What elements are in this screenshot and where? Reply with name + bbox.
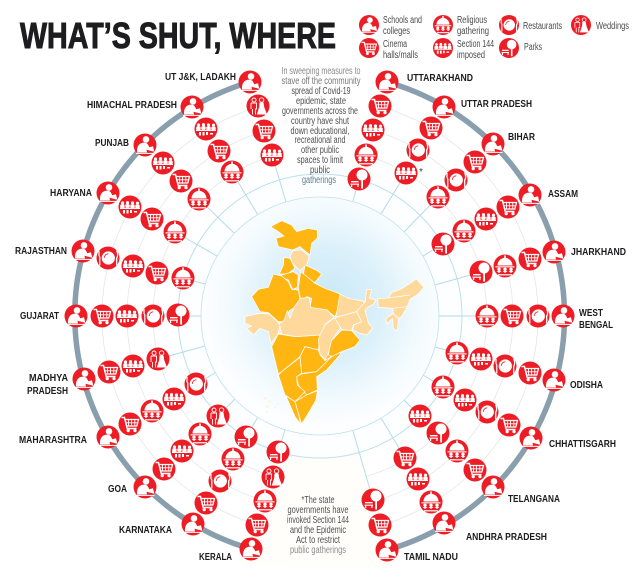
shut states: [252, 221, 360, 424]
state: Punjab: PUNJAB: [95, 137, 129, 149]
state: Goa: [108, 404, 230, 498]
state: UT J&K, Ladakh: UT J&K, LADAKH: [165, 71, 236, 83]
state: Chhattisgarh: [432, 376, 616, 450]
state: Maharashtra: [19, 372, 208, 448]
footnote: governments have: [288, 505, 349, 516]
state: Madhya Pradesh: MADHYA: [29, 372, 68, 384]
legend item: restaurants: Restaurants: [523, 21, 562, 32]
state: UT J&K, Ladakh: [165, 70, 284, 166]
state: Haryana: HARYANA: [50, 187, 92, 199]
footnote: Act to restrict: [296, 535, 340, 546]
map of India: [245, 221, 424, 424]
state: Uttar Pradesh: UTTAR PRADESH: [461, 98, 532, 110]
intro text: governments across the: [282, 106, 358, 117]
state: Madhya Pradesh: [27, 348, 170, 397]
legend item: parks: Parks: [524, 42, 542, 53]
legend item: cinema halls/malls: halls/malls: [383, 50, 418, 61]
state: Uttar Pradesh: [394, 96, 532, 184]
legend item: section 144 imposed: imposed: [457, 50, 485, 61]
intro text: gatherings: [302, 175, 336, 186]
state: Karnataka: KARNATAKA: [119, 524, 172, 536]
state: Uttar Pradesh: *: [419, 167, 423, 178]
grey outer ring: [75, 82, 564, 550]
footnote: *The state: [302, 495, 335, 506]
legend item: weddings: Weddings: [596, 21, 629, 32]
footnote: public gatherings: [290, 545, 346, 556]
state: West Bengal: WEST: [579, 307, 603, 319]
state: Goa: GOA: [108, 483, 127, 495]
state: Haryana: [50, 182, 186, 244]
state: Andhra Pradesh: ANDHRA PRADESH: [466, 531, 547, 543]
state: Kerala: [199, 440, 290, 563]
intro text: In sweeping measures to: [282, 66, 361, 77]
state: Madhya Pradesh: PRADESH: [27, 385, 68, 397]
intro text: spread of Covid-19: [292, 86, 351, 97]
intro text: epidemic, state: [296, 96, 346, 107]
state: Rajasthan: RAJASTHAN: [15, 245, 67, 257]
legend item: cinema halls/malls: [359, 38, 418, 61]
footnote: invoked Section 144: [287, 515, 349, 526]
partly shut states: [245, 250, 424, 360]
title: WHAT’S SHUT, WHERE: [20, 15, 336, 56]
state: Jharkhand: [470, 240, 626, 284]
state: Uttarakhand: [348, 70, 473, 190]
state: Karnataka: [119, 426, 258, 536]
state: Gujarat: [20, 304, 190, 328]
state: Himachal Pradesh: [87, 96, 244, 184]
state: Telangana: [408, 404, 560, 505]
intro text: recreational and: [294, 135, 346, 146]
intro text: country have shut: [291, 116, 349, 127]
legend item: cinema halls/malls: Cinema: [383, 39, 407, 50]
state: Tamil Nadu: [362, 488, 458, 563]
legend item: religious gathering: [433, 15, 489, 37]
legend item: schools and colleges: Schools and: [383, 15, 422, 26]
intro text: public: [310, 165, 330, 176]
intro text: [282, 66, 361, 186]
state: Jharkhand: JHARKHAND: [571, 246, 626, 258]
state: Assam: ASSAM: [548, 188, 578, 200]
state: Uttarakhand: UTTARAKHAND: [407, 72, 473, 84]
legend item: parks: [499, 38, 542, 58]
legend item: religious gathering: Religious: [457, 15, 487, 26]
legend item: section 144 imposed: [433, 38, 494, 61]
state: Kerala: KERALA: [199, 551, 232, 563]
state: Punjab: [95, 134, 210, 210]
legend item: weddings: [571, 15, 629, 35]
state: Chhattisgarh: CHHATTISGARH: [549, 438, 616, 450]
footnote: [287, 495, 349, 556]
legend: [359, 15, 629, 61]
state: Himachal Pradesh: HIMACHAL PRADESH: [87, 99, 177, 111]
intro text: spaces to limit: [297, 155, 343, 166]
legend item: schools and colleges: colleges: [383, 26, 410, 37]
state: Assam: [432, 184, 578, 256]
central disc: [201, 197, 439, 435]
state: Odisha: ODISHA: [570, 379, 603, 391]
state: West Bengal: BENGAL: [579, 319, 613, 331]
intro text: other public: [301, 145, 339, 156]
state: Tamil Nadu: TAMIL NADU: [404, 551, 458, 563]
legend item: restaurants: [499, 15, 562, 35]
legend item: section 144 imposed: Section 144: [457, 39, 494, 50]
state: West Bengal: [476, 304, 613, 331]
legend item: religious gathering: gathering: [457, 26, 489, 37]
footnote: and the Epidemic: [290, 525, 346, 536]
state: Odisha: [446, 342, 603, 392]
state: Gujarat: GUJARAT: [20, 310, 59, 322]
state: Maharashtra: MAHARASHTRA: [19, 434, 87, 446]
state: Telangana: TELANGANA: [508, 493, 560, 505]
state: Bihar: [426, 131, 535, 208]
legend item: schools and colleges: [359, 15, 422, 37]
state: Rajasthan: [15, 240, 194, 290]
state: Bihar: BIHAR: [508, 131, 535, 143]
state: Andhra Pradesh: [394, 446, 547, 543]
intro text: down educational,: [290, 126, 350, 137]
intro text: stave off the community: [282, 76, 360, 87]
